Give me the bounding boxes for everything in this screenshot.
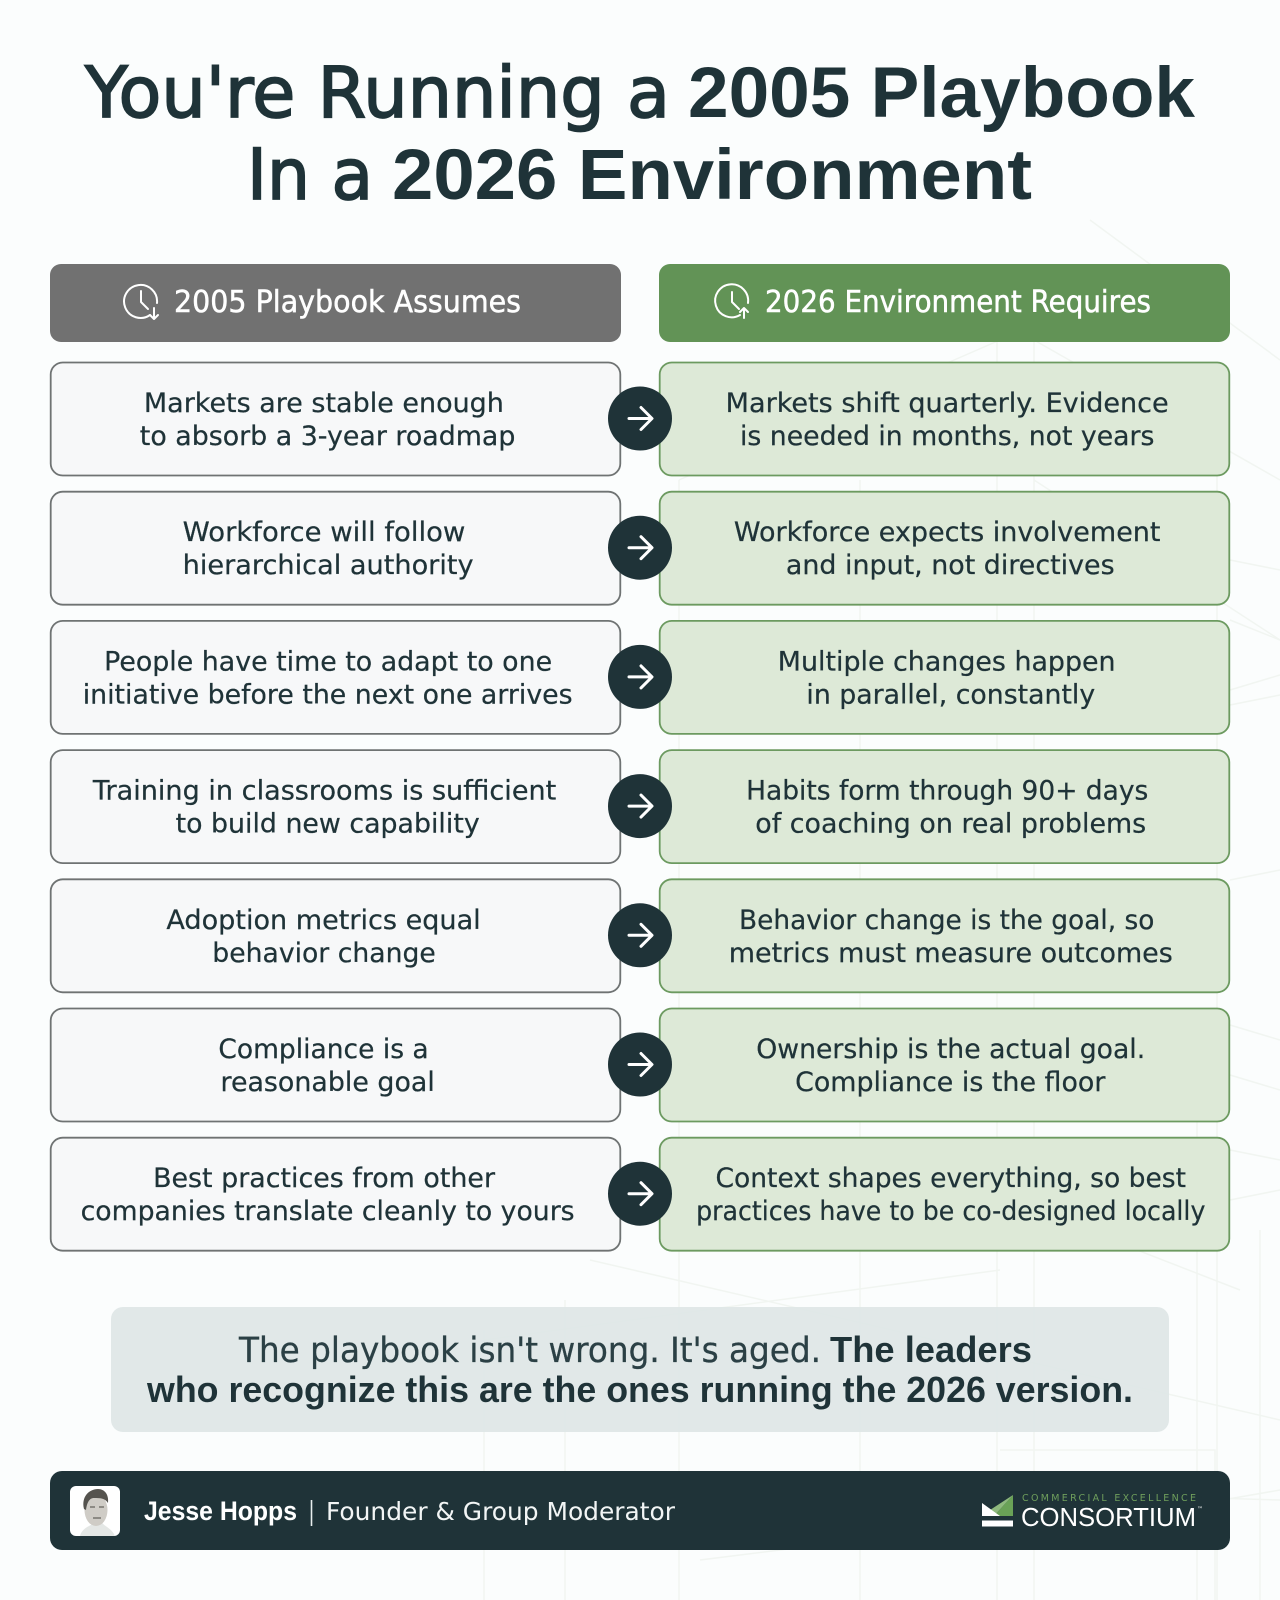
right card bbox=[660, 362, 1229, 476]
divider bar bbox=[310, 1500, 312, 1526]
comparison row 1 bbox=[51, 362, 1229, 476]
icon: clock with down arrow bbox=[124, 285, 158, 319]
right card bbox=[660, 1008, 1229, 1122]
left card: companies translate cleanly to yours bbox=[81, 1196, 575, 1227]
comparison row 3 bbox=[51, 621, 1229, 734]
header label: 2026 Environment Requires bbox=[765, 285, 1151, 320]
left card: initiative before the next one arrives bbox=[83, 679, 573, 710]
panel header: 2005 Playbook Assumes bbox=[50, 264, 621, 342]
right card: of coaching on real problems bbox=[755, 809, 1146, 840]
panel header: 2026 Environment Requires bbox=[659, 264, 1230, 342]
right card: practices have to be co-designed locally bbox=[696, 1196, 1205, 1227]
callout: The leaders bbox=[830, 1329, 1032, 1370]
right card bbox=[660, 879, 1229, 992]
comparison row 6 bbox=[51, 1008, 1229, 1122]
arrow badge bbox=[608, 903, 672, 967]
arrow badge bbox=[608, 774, 672, 838]
comparison row 2 bbox=[51, 492, 1229, 605]
left card bbox=[51, 879, 620, 992]
right card: is needed in months, not years bbox=[740, 421, 1154, 452]
left card: behavior change bbox=[212, 938, 436, 969]
logo: Commercial Excellence Consortium: ™ bbox=[1197, 1506, 1203, 1513]
right card bbox=[660, 750, 1229, 863]
left card bbox=[51, 362, 620, 476]
left card: Training in classrooms is sufficient bbox=[92, 776, 556, 807]
right card: and input, not directives bbox=[786, 550, 1115, 581]
title: 2026 Environment bbox=[392, 136, 1032, 215]
right card: metrics must measure outcomes bbox=[729, 938, 1173, 969]
left card bbox=[51, 750, 620, 863]
right card: Compliance is the floor bbox=[795, 1067, 1106, 1098]
comparison row 5 bbox=[51, 879, 1229, 992]
right card: Ownership is the actual goal. bbox=[756, 1034, 1145, 1065]
left card: reasonable goal bbox=[220, 1067, 435, 1098]
right card: Context shapes everything, so best bbox=[716, 1163, 1186, 1194]
presenter role: Founder & Group Moderator bbox=[326, 1497, 676, 1526]
right card: in parallel, constantly bbox=[806, 679, 1095, 710]
left card: People have time to adapt to one bbox=[104, 646, 552, 677]
right card: Workforce expects involvement bbox=[734, 517, 1160, 548]
left card: to absorb a 3-year roadmap bbox=[140, 421, 515, 452]
title: You're Running a bbox=[84, 52, 670, 134]
callout: who recognize this are the ones running the 2026 version. bbox=[146, 1369, 1133, 1410]
left card bbox=[51, 621, 620, 734]
header label: 2005 Playbook Assumes bbox=[174, 285, 521, 320]
logo: Commercial Excellence Consortium: CONSORTIUM bbox=[1021, 1502, 1196, 1532]
left card: Adoption metrics equal bbox=[166, 905, 481, 936]
left card: to build new capability bbox=[176, 809, 480, 840]
arrow badge bbox=[608, 516, 672, 580]
left card bbox=[51, 492, 620, 605]
title: In a bbox=[247, 134, 373, 216]
title: 2005 Playbook bbox=[688, 54, 1196, 133]
callout bbox=[111, 1307, 1169, 1432]
presenter name: Jesse Hopps bbox=[144, 1496, 297, 1526]
left card: Markets are stable enough bbox=[144, 388, 504, 419]
right card: Habits form through 90+ days bbox=[746, 776, 1148, 807]
left card: Best practices from other bbox=[153, 1163, 496, 1194]
arrow badge bbox=[608, 386, 672, 450]
arrow badge bbox=[608, 1162, 672, 1226]
footer bar bbox=[50, 1471, 1230, 1550]
logo: Commercial Excellence Consortium: COMMERCIAL EXCELLENCE bbox=[1022, 1493, 1196, 1504]
right card: Behavior change is the goal, so bbox=[739, 905, 1154, 936]
right card: Multiple changes happen bbox=[778, 646, 1116, 677]
right card bbox=[660, 1138, 1229, 1251]
left card: Compliance is a bbox=[218, 1034, 429, 1065]
right card bbox=[660, 492, 1229, 605]
arrow badge bbox=[608, 1032, 672, 1096]
right card: Markets shift quarterly. Evidence bbox=[726, 388, 1169, 419]
left card: hierarchical authority bbox=[183, 550, 474, 581]
left card bbox=[51, 1008, 620, 1122]
arrow badge bbox=[608, 645, 672, 709]
left card: Workforce will follow bbox=[183, 517, 465, 548]
logo: Commercial Excellence Consortium bbox=[982, 1493, 1203, 1532]
callout: The playbook isn't wrong. It's aged. bbox=[238, 1331, 821, 1371]
comparison row 4 bbox=[51, 750, 1229, 863]
right card bbox=[660, 621, 1229, 734]
title bbox=[84, 52, 1196, 216]
icon: clock with up arrow bbox=[715, 284, 748, 318]
left card bbox=[51, 1138, 620, 1251]
portrait bbox=[70, 1486, 120, 1536]
comparison row 7 bbox=[51, 1138, 1229, 1251]
